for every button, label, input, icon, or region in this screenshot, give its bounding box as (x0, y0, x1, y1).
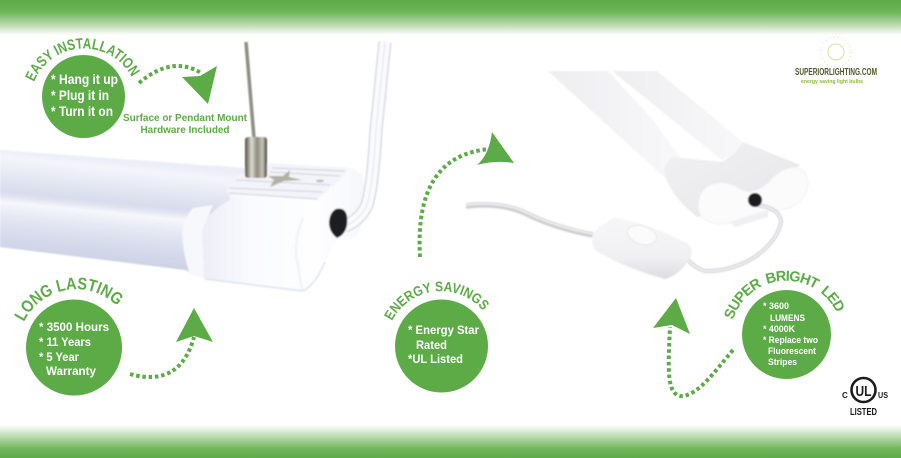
list: *UL Listed (408, 352, 463, 366)
end cap body (202, 163, 364, 292)
flat power cord (466, 204, 593, 235)
us mark: US (878, 391, 889, 400)
arrow: energy savings (420, 132, 514, 257)
top green gradient band (0, 0, 901, 35)
UL letters: UL (856, 383, 872, 400)
list: Rated (416, 338, 447, 352)
list (763, 301, 818, 367)
curved heading: EASY INSTALLATION (25, 38, 140, 82)
logo bulb mark (821, 37, 851, 67)
hardware note (123, 113, 248, 136)
cap underside edge (205, 262, 325, 291)
list: * 11 Years (39, 335, 91, 349)
left light fixture photo (0, 42, 385, 292)
list: * Energy Star (408, 323, 479, 337)
second tube (612, 71, 743, 160)
ridged mounting plate (227, 163, 350, 200)
panel: easy installation (25, 38, 140, 138)
collar (182, 205, 213, 279)
arrow: easy installation (139, 66, 217, 104)
c mark: C (842, 391, 848, 400)
right light fixture photo (466, 71, 808, 279)
black knob (748, 193, 762, 207)
panel: energy savings (384, 282, 489, 392)
list: * 3600 (763, 301, 789, 311)
UL listed mark (842, 378, 889, 418)
cord to switch (688, 205, 781, 271)
list: * Hang it up (51, 71, 118, 87)
arrow: super bright led (653, 298, 733, 396)
inline switch body (592, 218, 692, 279)
UL ring (852, 378, 876, 402)
list (408, 323, 479, 366)
green circle (395, 300, 488, 392)
curved heading: ENERGY SAVINGS (384, 282, 489, 320)
end plate (698, 167, 808, 224)
bracket tab (730, 210, 768, 227)
switch rocker (625, 222, 659, 248)
hardware note: Surface or Pendant Mount (123, 113, 248, 124)
green circle (26, 300, 122, 396)
list: * Replace two (763, 335, 818, 345)
list: Warranty (46, 364, 96, 378)
metal gripper (245, 137, 267, 178)
black cable grommet (329, 209, 347, 238)
power cable (345, 42, 385, 226)
list: Stripes (768, 357, 797, 367)
curved heading: LONG LASTING (14, 278, 122, 322)
green circle (42, 55, 125, 138)
bottom green gradient band (0, 425, 901, 458)
list: * 5 Year (39, 350, 79, 364)
panel: super bright led (724, 270, 844, 379)
listed caption: LISTED (850, 407, 877, 418)
arrow: long lasting (130, 308, 213, 377)
cap end disc shading (296, 217, 303, 291)
list: * Plug it in (51, 87, 109, 103)
suspension wire (246, 42, 254, 138)
twin tube body (0, 150, 245, 279)
list (39, 320, 109, 378)
first tube (548, 71, 680, 178)
list: LUMENS (770, 313, 805, 323)
clip screw (316, 180, 324, 182)
mounting clip (268, 170, 302, 187)
logo tagline: energy saving light bulbs (801, 79, 863, 85)
logo: superiorlighting.com (795, 37, 877, 85)
green circle (742, 290, 831, 379)
list: * Turn it on (51, 103, 113, 119)
panel: long lasting (14, 278, 122, 396)
list (51, 71, 118, 119)
list: * 3500 Hours (39, 320, 109, 334)
collars (664, 142, 800, 217)
list: Fluorescent (768, 346, 816, 356)
list: * 4000K (763, 324, 795, 334)
curved heading: SUPER BRIGHT LED (724, 270, 844, 319)
hardware note: Hardware Included (140, 125, 230, 136)
